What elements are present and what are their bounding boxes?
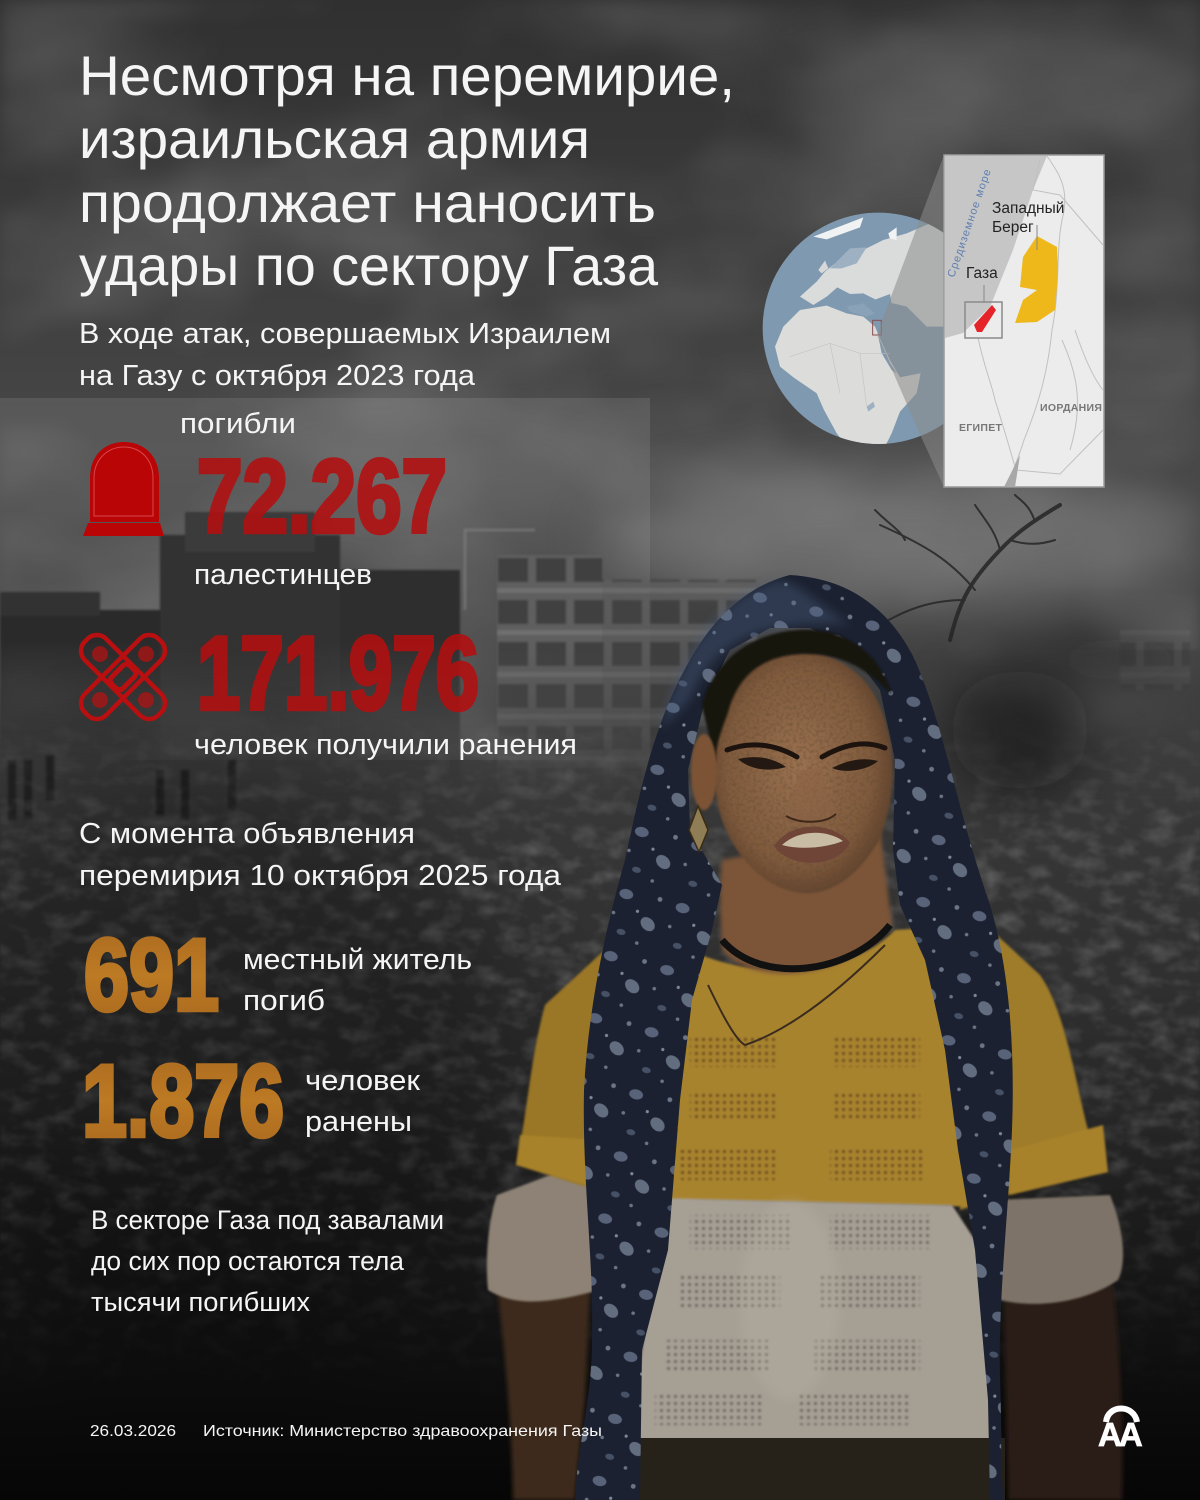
locator map: globe with inset bbox=[763, 155, 1104, 487]
globe bbox=[762, 212, 944, 444]
yellow sweater bbox=[516, 915, 1108, 1210]
Mediterranean Sea bbox=[945, 156, 1047, 338]
subtitle bbox=[79, 318, 611, 392]
eyes bbox=[738, 757, 878, 771]
title: продолжает наносить bbox=[79, 171, 656, 234]
arms bbox=[497, 1285, 1123, 1500]
Gaza strip bbox=[974, 305, 996, 332]
West Bank bbox=[1015, 236, 1058, 323]
note: bodies under rubble: тысячи погибших bbox=[91, 1287, 310, 1317]
stat: killed since ceasefire bbox=[84, 918, 472, 1032]
mouth bbox=[774, 827, 850, 863]
map inset: ИОРДАНИЯ bbox=[1040, 402, 1102, 414]
terrain lines bbox=[978, 156, 1103, 487]
dark lower sweater bbox=[610, 1438, 1005, 1500]
title: удары по сектору Газа bbox=[79, 234, 659, 297]
ear bbox=[691, 734, 717, 810]
logo: Anadolu Agency: AA bbox=[1098, 1416, 1142, 1453]
stat: wounded since ceasefire: ранены bbox=[305, 1106, 412, 1138]
headscarf bbox=[575, 575, 1013, 1500]
map inset: Средиземное море bbox=[945, 167, 994, 279]
panel: translucent stats backdrop bbox=[0, 398, 650, 798]
undershirt sleeves bbox=[487, 1160, 1123, 1304]
heading: since the ceasefire: С момента объявления bbox=[79, 818, 415, 850]
subtitle: В ходе атак, совершаемых Израилем bbox=[79, 318, 611, 350]
map inset: ЕГИПЕТ bbox=[959, 422, 1003, 434]
note: bodies under rubble bbox=[91, 1205, 444, 1317]
stat: killed bbox=[180, 408, 447, 591]
nose bbox=[785, 770, 836, 824]
stat: killed since ceasefire: местный житель bbox=[243, 944, 472, 976]
map labels: Западный bbox=[992, 200, 1064, 217]
globe location marker bbox=[873, 320, 881, 335]
hair bbox=[702, 630, 892, 765]
inset cone bbox=[877, 155, 944, 487]
background rubble field bbox=[0, 636, 1200, 1500]
background buildings bbox=[0, 511, 1195, 762]
map inset: Берег bbox=[992, 219, 1034, 236]
map inset: Газа bbox=[966, 265, 998, 282]
icon: crossed bandages bbox=[76, 630, 170, 724]
icon: gravestone bbox=[83, 442, 164, 536]
footer: date and source: Источник: Министерство здравоохранения Газы bbox=[203, 1423, 602, 1440]
heading: since the ceasefire: перемирия 10 октября 2025 года bbox=[79, 860, 562, 892]
title: Несмотря на перемирие, bbox=[79, 44, 735, 107]
background tree bbox=[875, 495, 1060, 640]
eyebrows bbox=[727, 744, 885, 757]
neck bbox=[720, 830, 892, 974]
subtitle: на Газу с октября 2023 года bbox=[79, 360, 476, 392]
face bbox=[689, 630, 900, 900]
footer: date and source bbox=[90, 1423, 602, 1440]
stat: wounded since ceasefire: 1.876 bbox=[82, 1044, 284, 1158]
cream sweater band bbox=[630, 1198, 1000, 1440]
map inset bbox=[944, 155, 1104, 487]
heading: since the ceasefire bbox=[79, 818, 562, 892]
Gaza box bbox=[965, 302, 1002, 338]
photo: girl in headscarf bbox=[487, 575, 1123, 1500]
stat: killed: погибли bbox=[180, 408, 296, 440]
stat: wounded since ceasefire: человек bbox=[305, 1065, 420, 1097]
earring bbox=[689, 806, 708, 852]
stat: wounded: человек получили ранения bbox=[194, 729, 577, 761]
title: израильская армия bbox=[79, 107, 590, 170]
stat: killed: палестинцев bbox=[194, 559, 372, 591]
necklace bbox=[708, 945, 885, 1045]
stat: wounded: 171.976 bbox=[197, 616, 479, 732]
stat: killed: 72.267 bbox=[197, 439, 447, 555]
title bbox=[79, 44, 735, 297]
stat: killed since ceasefire: 691 bbox=[84, 918, 219, 1032]
background crowd bbox=[12, 755, 232, 820]
note: bodies under rubble: до сих пор остаются тела bbox=[91, 1246, 405, 1276]
stat: killed since ceasefire: погиб bbox=[243, 985, 325, 1017]
note: bodies under rubble: В секторе Газа под завалами bbox=[91, 1205, 444, 1235]
footer: date and source: 26.03.2026 bbox=[90, 1423, 176, 1440]
